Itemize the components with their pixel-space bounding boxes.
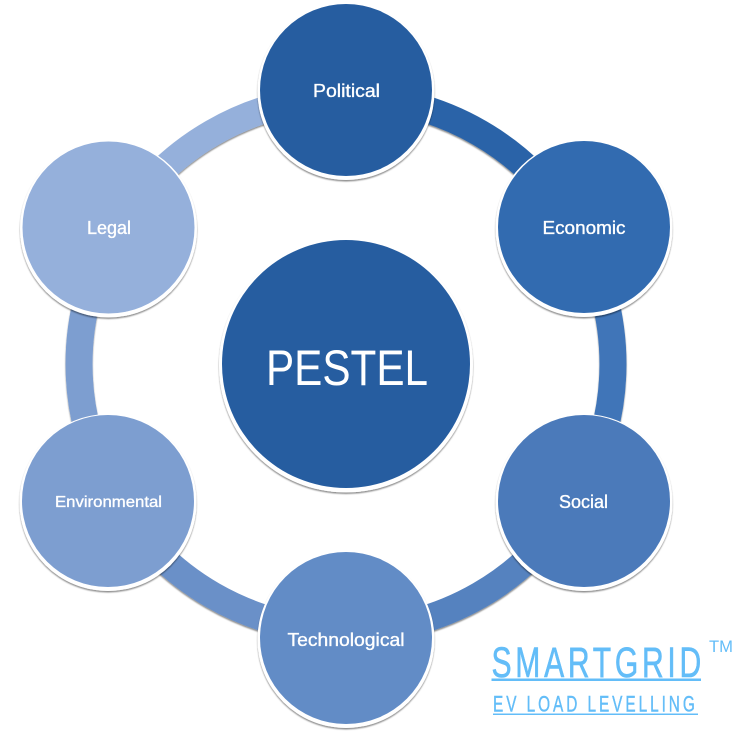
node: Political: [258, 3, 434, 180]
node: Legal: Legal: [87, 218, 131, 238]
node: Social: [496, 414, 672, 591]
ring arc: environmental to legal: [79, 230, 115, 498]
node: Environmental: [20, 414, 196, 591]
ring arc: political to economic: [346, 97, 577, 230]
node: Legal: [20, 140, 197, 318]
ring arc: social to technological: [346, 498, 577, 631]
ring arc: technological to environmental: [115, 498, 346, 631]
node: Social: Social: [559, 492, 608, 512]
center node: PESTEL: PESTEL: [266, 340, 428, 396]
node: Political: Political: [313, 81, 380, 101]
ring arc: economic to social: [577, 230, 613, 498]
ring arc: legal to political: [115, 97, 346, 230]
center node: PESTEL: [219, 238, 473, 492]
logo: SMARTGRID: TM: [709, 637, 733, 656]
logo: SMARTGRID: EV LOAD LEVELLING: [493, 693, 698, 717]
node: Economic: Economic: [542, 218, 626, 238]
node: Economic: [496, 140, 672, 317]
node: Environmental: Environmental: [55, 494, 162, 511]
node: Technological: Technological: [288, 630, 404, 650]
node: Technological: [258, 551, 434, 728]
logo: SMARTGRID: [492, 637, 733, 717]
logo: SMARTGRID: SMARTGRID: [492, 638, 705, 686]
